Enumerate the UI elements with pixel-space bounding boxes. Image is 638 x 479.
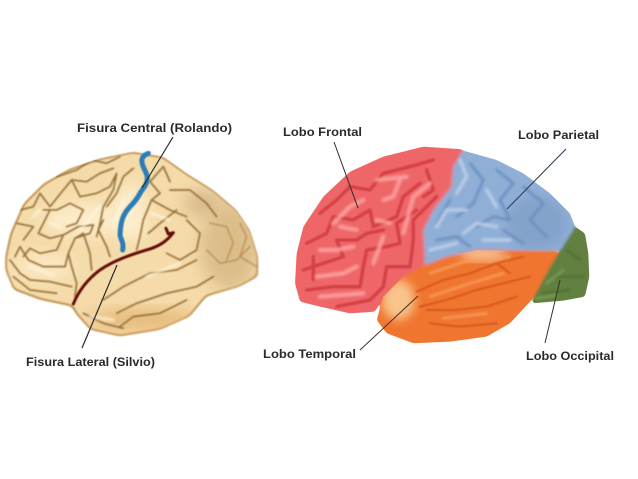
panel: left brain with fissures (5, 121, 260, 369)
label: central fissure: Fisura Central (Rolando) (77, 121, 232, 135)
label: temporal: Lobo Temporal (263, 347, 356, 361)
leader line: parietal (507, 149, 566, 209)
label: parietal: Lobo Parietal (518, 128, 599, 142)
label: lateral fissure: Fisura Lateral (Silvio) (26, 355, 155, 369)
leader line: occipital (545, 280, 560, 343)
central fissure (blue) (120, 153, 148, 250)
lateral fissure (dark red) (73, 228, 173, 304)
lobe: parietal (blue) (430, 160, 567, 250)
label: frontal: Lobo Frontal (283, 125, 362, 139)
brain silhouette: lobe base colours (295, 147, 589, 343)
label: occipital: Lobo Occipital (526, 349, 614, 363)
lobe: temporal (orange) (382, 249, 530, 327)
leader line: frontal (334, 142, 358, 208)
leader line: central fissure (142, 137, 173, 188)
lobe: occipital (green) (537, 250, 583, 298)
panel: right brain with lobes (263, 125, 614, 363)
leader line: temporal (360, 296, 418, 350)
leader line: lateral fissure (82, 265, 117, 348)
lobe: frontal (red) (303, 160, 437, 307)
illustration: tan cerebral cortex (5, 152, 260, 337)
